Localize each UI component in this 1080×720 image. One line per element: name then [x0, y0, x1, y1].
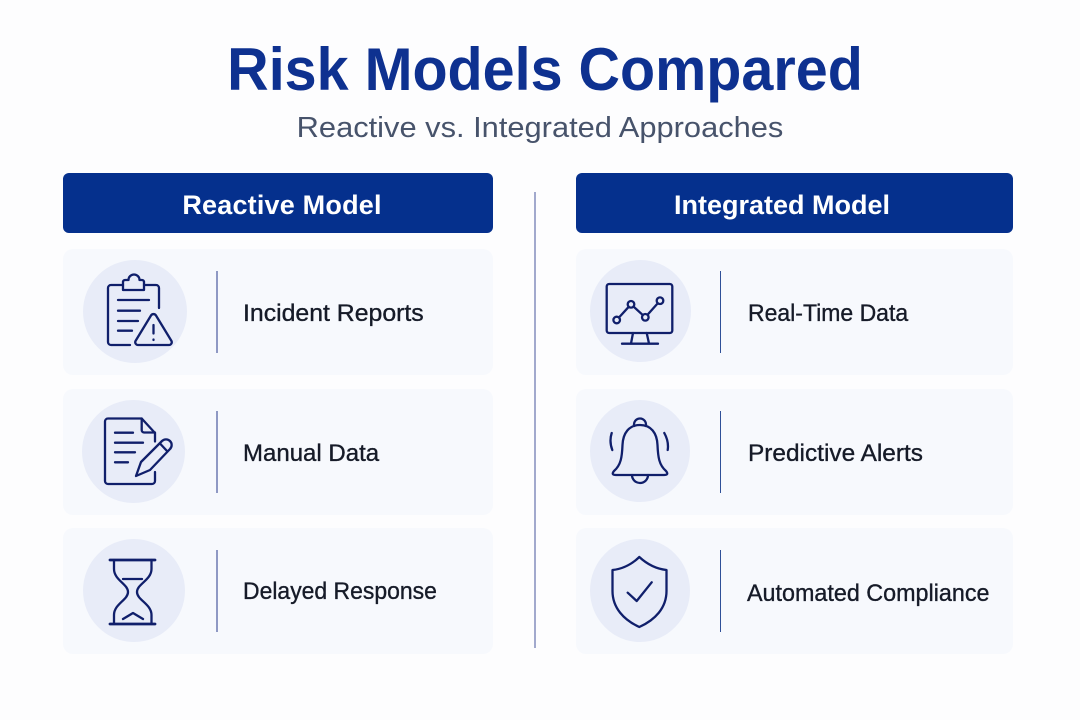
panel: real-time data	[576, 249, 1013, 375]
label: Real-Time Data	[748, 300, 908, 327]
header: reactive model: Reactive Model	[182, 190, 382, 220]
icon background	[590, 400, 690, 502]
label: Incident Reports	[243, 300, 424, 327]
label: Delayed Response	[243, 578, 437, 605]
icon background	[83, 260, 187, 363]
divider	[216, 411, 218, 493]
title: Risk Models Compared	[227, 36, 863, 103]
divider	[720, 271, 721, 353]
panel: manual data	[63, 389, 493, 515]
icon background	[590, 260, 691, 362]
header: integrated model: Integrated Model	[674, 190, 890, 220]
panel: delayed response	[63, 528, 493, 654]
divider	[720, 411, 721, 493]
icon: shield with check	[611, 556, 668, 628]
panel: incident reports	[63, 249, 493, 375]
panel: automated compliance	[576, 528, 1013, 654]
label: Manual Data	[243, 440, 379, 467]
icon: monitor with line chart	[606, 282, 674, 345]
subtitle: Reactive vs. Integrated Approaches	[297, 112, 783, 144]
label: Automated Compliance	[747, 580, 989, 607]
icon: bell	[609, 417, 670, 484]
label: Predictive Alerts	[748, 440, 923, 467]
icon background	[82, 400, 185, 503]
center divider	[534, 192, 536, 648]
divider	[720, 550, 721, 632]
header: reactive model	[63, 173, 493, 233]
icon background	[83, 539, 185, 642]
panel: predictive alerts	[576, 389, 1013, 515]
divider	[216, 550, 218, 632]
divider	[216, 271, 218, 353]
icon background	[590, 539, 690, 642]
header: integrated model	[576, 173, 1013, 233]
icon: hourglass	[108, 558, 156, 626]
icon: clipboard with warning	[106, 273, 173, 346]
icon: document with pencil	[104, 417, 173, 486]
